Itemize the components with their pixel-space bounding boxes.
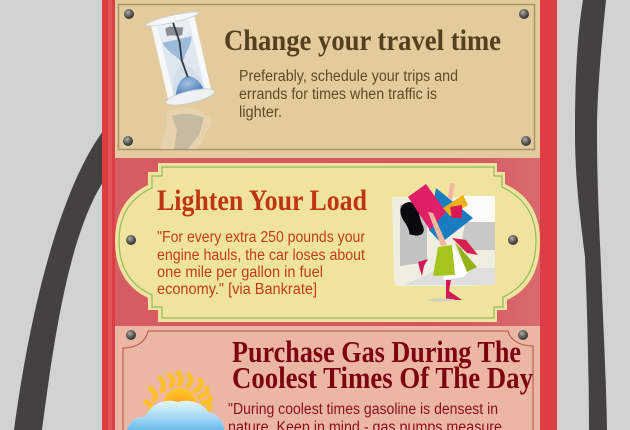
icon: sun and cloud	[127, 373, 224, 430]
red gift	[450, 205, 462, 218]
text block: lighter.	[239, 104, 282, 121]
screw	[126, 330, 136, 340]
icon: shopper woman	[392, 183, 495, 302]
panel: purchase gas	[115, 326, 540, 430]
right leg and shoe	[446, 280, 462, 300]
text block: errands for times when traffic is	[239, 86, 437, 103]
text block: engine hauls, the car loses about	[157, 247, 366, 264]
left cable	[14, 131, 103, 430]
screw	[508, 235, 518, 245]
white bag and skirt	[443, 245, 468, 280]
left leg and shoe	[418, 259, 428, 276]
screw	[124, 9, 134, 19]
text block: "For every extra 250 pounds your	[157, 229, 365, 246]
heading: Purchase Gas During The	[232, 335, 521, 369]
gold gift	[443, 195, 468, 216]
panel: change your travel time	[115, 0, 540, 158]
icon: hourglass	[145, 10, 218, 149]
screw	[123, 136, 133, 146]
text block: economy." [via Bankrate]	[157, 281, 317, 298]
upper bulb	[157, 17, 197, 64]
second green bag	[455, 242, 477, 272]
heading: Lighten Your Load	[157, 184, 367, 217]
screw	[126, 235, 136, 245]
screw	[518, 330, 528, 340]
caps	[145, 10, 199, 28]
text block: one mile per gallon in fuel	[157, 264, 323, 281]
blue box	[429, 188, 473, 243]
panel: lighten your load	[115, 158, 540, 326]
hair	[400, 202, 424, 236]
lower bulb	[167, 58, 205, 98]
text block	[239, 68, 458, 121]
green bag	[433, 245, 455, 276]
plaque	[115, 163, 540, 322]
frame pillars	[151, 14, 211, 101]
screw	[521, 136, 531, 146]
screw	[519, 9, 529, 19]
pink box	[408, 184, 446, 230]
heading: Change your travel time	[224, 25, 501, 57]
text block: Preferably, schedule your trips and	[239, 68, 458, 85]
pink bag	[452, 238, 478, 255]
upper arm	[448, 183, 455, 200]
text block	[157, 229, 366, 298]
heading line 2: Coolest Times Of The Day	[232, 361, 533, 395]
right cable	[575, 0, 607, 430]
text block	[228, 401, 502, 430]
hourglass reflection	[160, 108, 212, 149]
text block: "During coolest times gasoline is densest in	[228, 401, 498, 418]
red pump body	[102, 0, 557, 430]
arm	[428, 212, 447, 246]
